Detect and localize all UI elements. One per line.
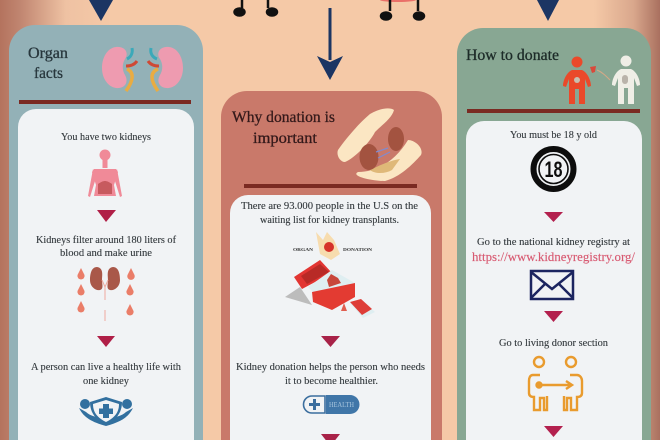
text: age: You must be 18 y old	[510, 130, 598, 141]
icon: organ donation box: DONATION	[343, 247, 373, 252]
icon: two people exchanging	[529, 357, 582, 410]
text: registry: Go to the national kidney registry at	[477, 237, 630, 248]
triangle	[544, 311, 563, 322]
divider	[244, 184, 417, 188]
text: healthier: it to become healthier.	[285, 376, 378, 387]
icon: kidneys	[102, 47, 183, 91]
text: healthy life	[31, 362, 182, 387]
heading: why donation: important	[253, 130, 318, 147]
icon: kidneys with drops	[77, 267, 135, 321]
icon: hands holding kidney	[337, 108, 422, 181]
heading: organ facts	[28, 45, 68, 82]
icon: skeleton	[88, 150, 122, 197]
panel: organ facts	[9, 25, 203, 440]
arrow: left	[89, 0, 113, 21]
triangle	[97, 336, 115, 347]
text: healthy life: one kidney	[83, 376, 130, 387]
heading: organ facts: facts	[34, 65, 63, 82]
text: waiting list: waiting list for kidney transplants.	[260, 215, 399, 226]
arrow: right	[537, 0, 559, 21]
icon: health pill: HEALTH	[329, 401, 354, 409]
icon: 18 badge	[534, 149, 574, 189]
text: waiting list: There are 93.000 people in the U.S on the	[241, 201, 418, 212]
mascot feet: right	[380, 0, 424, 20]
heading: how to donate: How to donate	[466, 47, 559, 64]
card: organ facts	[18, 109, 194, 440]
icon: health pill	[304, 395, 360, 414]
text: two kidneys: You have two kidneys	[61, 132, 151, 143]
heading: organ facts: Organ	[28, 45, 68, 62]
text: living donor: Go to living donor section	[499, 338, 609, 349]
text: registry	[472, 237, 635, 264]
icon: donor and recipient	[563, 56, 640, 104]
heading: why donation: Why donation is	[232, 109, 335, 126]
icon: envelope	[531, 271, 573, 299]
icon: shield with people	[79, 397, 133, 426]
divider	[19, 100, 191, 104]
text: registry: https://www.kidneyregistry.org/	[472, 249, 635, 264]
text: filter: blood and make urine	[60, 248, 152, 259]
icon: organ donation box: ORGAN	[293, 247, 314, 252]
panel: why donation is important	[221, 91, 442, 440]
mascot feet: left	[234, 0, 277, 16]
text: filter	[36, 235, 176, 259]
heading: why donation	[232, 109, 335, 147]
text: filter: Kidneys filter around 180 liters of	[36, 235, 176, 246]
triangle	[544, 426, 563, 437]
triangle	[321, 336, 340, 347]
card: how to donate	[466, 121, 642, 440]
text: waiting list	[241, 201, 418, 226]
text: healthier: Kidney donation helps the person who needs	[236, 362, 425, 373]
divider	[467, 109, 640, 113]
triangle	[321, 434, 340, 440]
triangle	[97, 210, 116, 222]
icon: 18 badge: 18	[544, 157, 562, 182]
arrow: center	[317, 8, 343, 80]
icon: organ donation box	[285, 232, 375, 318]
triangle	[544, 212, 563, 222]
text: healthier	[236, 362, 425, 387]
card: why donation	[230, 195, 431, 440]
panel: how to donate	[457, 28, 651, 440]
text: healthy life: A person can live a healthy life with	[31, 362, 182, 373]
